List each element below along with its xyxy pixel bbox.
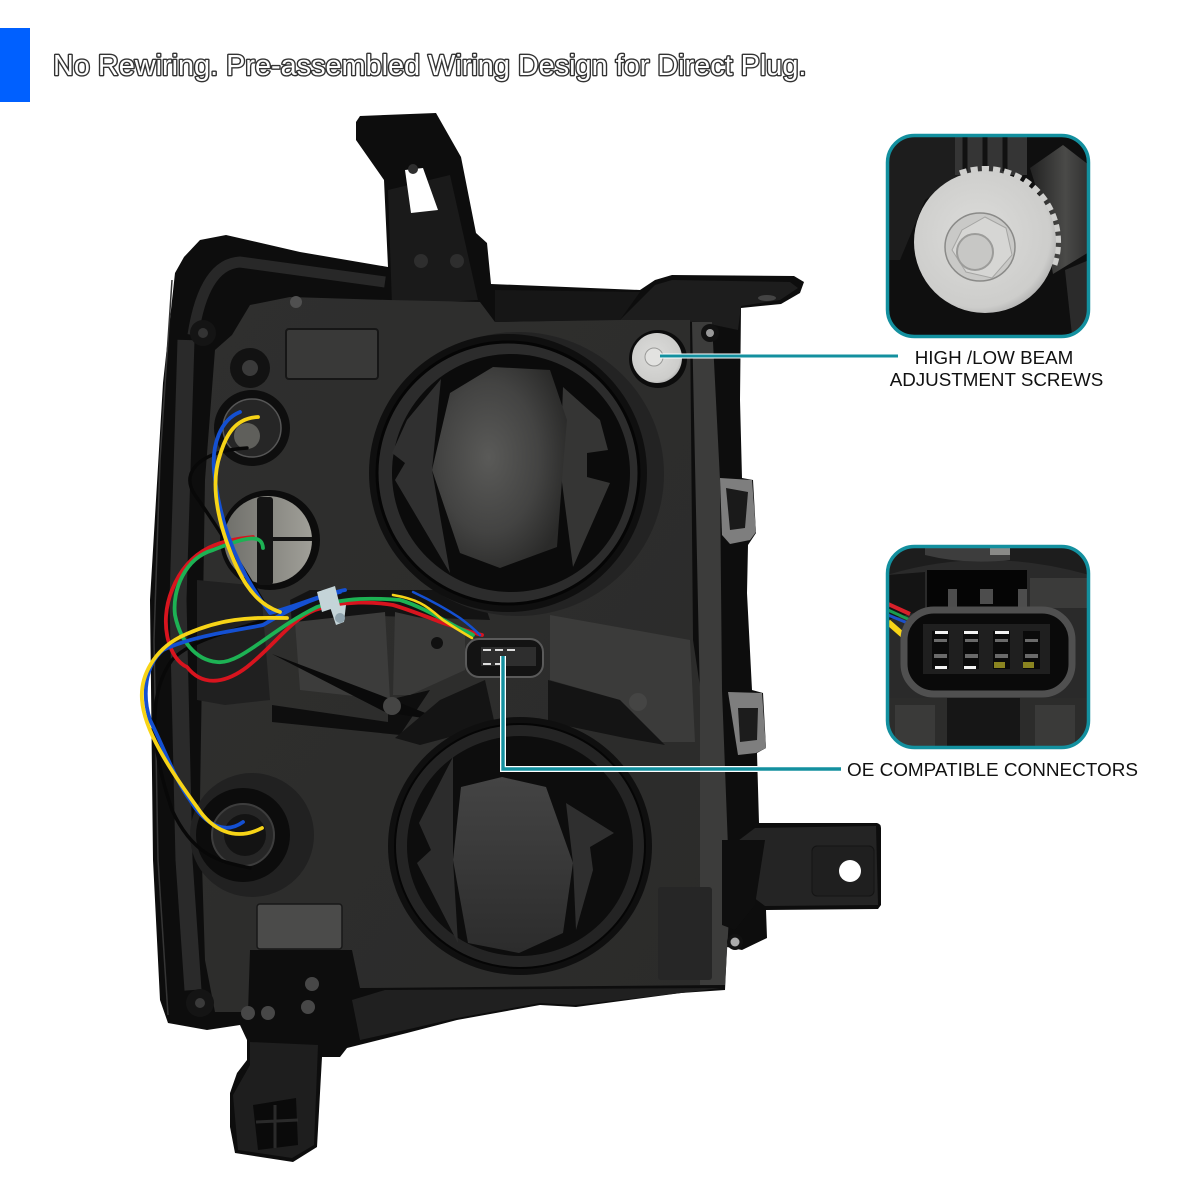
headlight rear view xyxy=(142,113,881,1162)
lower lens dome xyxy=(453,777,573,953)
left wire box xyxy=(197,580,270,705)
bracket slot xyxy=(405,168,438,213)
central grey panel xyxy=(295,612,390,700)
black wire middle loop xyxy=(155,620,265,868)
upper lens ring xyxy=(372,332,664,616)
light panel left of connector xyxy=(393,612,465,695)
inset frame xyxy=(888,136,1088,336)
inset: adjustment screw closeup xyxy=(887,135,1089,337)
title: No Rewiring. Pre-assembled Wiring Design for Direct Plug. xyxy=(53,50,806,82)
blue wire long xyxy=(146,592,340,828)
right mounting bracket xyxy=(726,826,878,906)
wire clip xyxy=(317,586,346,625)
wire stubs xyxy=(888,604,910,614)
upper lens dome xyxy=(432,367,567,568)
connector shell xyxy=(904,610,1072,694)
connector tabs xyxy=(948,589,1027,608)
fasteners xyxy=(186,296,743,1017)
wiring harness xyxy=(142,412,482,868)
top bracket face xyxy=(388,175,478,305)
yellow wire top xyxy=(215,417,280,612)
blue accent block xyxy=(0,28,30,102)
gear teeth xyxy=(960,170,1057,267)
tab hole xyxy=(758,295,776,301)
red wire xyxy=(166,537,482,681)
inset: connector closeup xyxy=(887,546,1089,748)
lower lens left band xyxy=(417,757,458,943)
right lower panel xyxy=(658,887,712,980)
rib nubs xyxy=(383,693,647,715)
lower socket xyxy=(190,773,314,897)
headlight silhouette xyxy=(150,113,881,1162)
light panel right of connector xyxy=(550,615,695,742)
label: connectors: OE COMPATIBLE CONNECTORS xyxy=(847,760,1138,781)
wiring connector xyxy=(466,639,543,677)
upper right tab face xyxy=(620,280,798,330)
label: adjustment screws: HIGH /LOW BEAM xyxy=(915,347,1073,368)
upper lens left band xyxy=(392,379,450,573)
blue wire right xyxy=(413,592,480,635)
bottom recess nubs xyxy=(241,977,319,1020)
nut disc xyxy=(914,171,1056,313)
black wire xyxy=(190,448,270,613)
bottom lower trim xyxy=(352,988,720,1040)
right side clip upper xyxy=(720,478,756,544)
callout line: connectors xyxy=(503,656,841,769)
upper socket xyxy=(214,390,290,466)
bottom clip xyxy=(233,1042,318,1158)
upper-left label plate xyxy=(286,329,378,379)
label: adjustment screws: ADJUSTMENT SCREWS xyxy=(890,369,1103,390)
yellow wire long xyxy=(142,618,287,834)
lower-left label plate xyxy=(257,904,342,949)
right bracket ribs xyxy=(722,840,765,930)
dark fan sectors xyxy=(395,680,495,745)
bracket nubs xyxy=(408,164,464,268)
inset frame xyxy=(888,546,1088,748)
upper lens right band xyxy=(560,387,610,567)
pin block xyxy=(923,624,1050,674)
callout line: adjustment screws xyxy=(660,354,898,358)
yellow wire right xyxy=(393,595,472,638)
adjustment screw xyxy=(629,330,687,388)
translucent right strip xyxy=(692,322,730,985)
main housing body xyxy=(200,297,725,1012)
grommet xyxy=(230,348,270,388)
right side clip lower xyxy=(728,692,766,755)
right bracket inset xyxy=(812,846,874,896)
left rib xyxy=(178,340,193,990)
bolt head xyxy=(945,213,1015,281)
round cover disc xyxy=(220,490,320,590)
lower lens ring xyxy=(388,717,652,975)
rib blade xyxy=(272,654,448,722)
left rim glint xyxy=(154,280,172,1015)
lower lens right band xyxy=(566,803,614,930)
dark lower rib channel xyxy=(272,690,430,735)
green wire xyxy=(175,538,473,662)
top black window xyxy=(495,290,640,322)
clip slots xyxy=(253,1098,298,1150)
right bracket hole xyxy=(839,860,861,882)
blue wire top xyxy=(214,412,345,613)
top inner channel xyxy=(193,262,385,335)
wire area dark band xyxy=(290,590,490,625)
